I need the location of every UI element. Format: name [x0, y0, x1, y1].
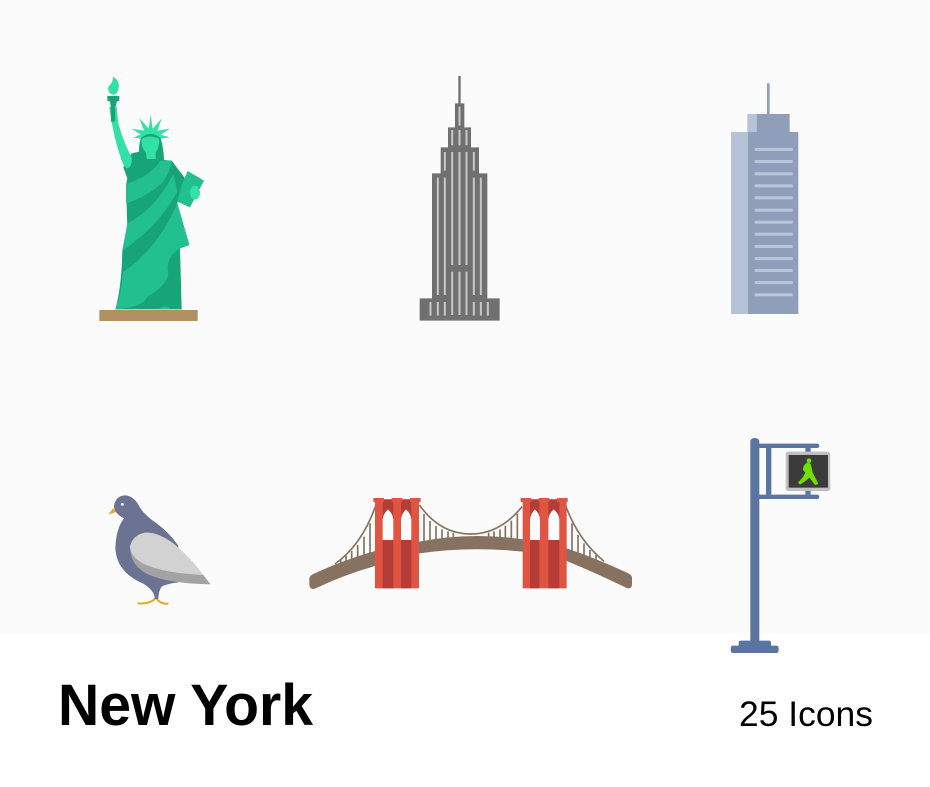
icon: skyscraper — [731, 83, 798, 314]
icon: pedestrian walk signal — [731, 438, 830, 653]
icon: Empire State Building — [420, 76, 500, 321]
icon count label: 25 Icons — [739, 695, 873, 734]
title: New York — [58, 673, 314, 738]
icon: pigeon — [108, 495, 211, 604]
icon: Statue of Liberty — [99, 77, 204, 321]
icon: Brooklyn Bridge — [309, 498, 632, 589]
